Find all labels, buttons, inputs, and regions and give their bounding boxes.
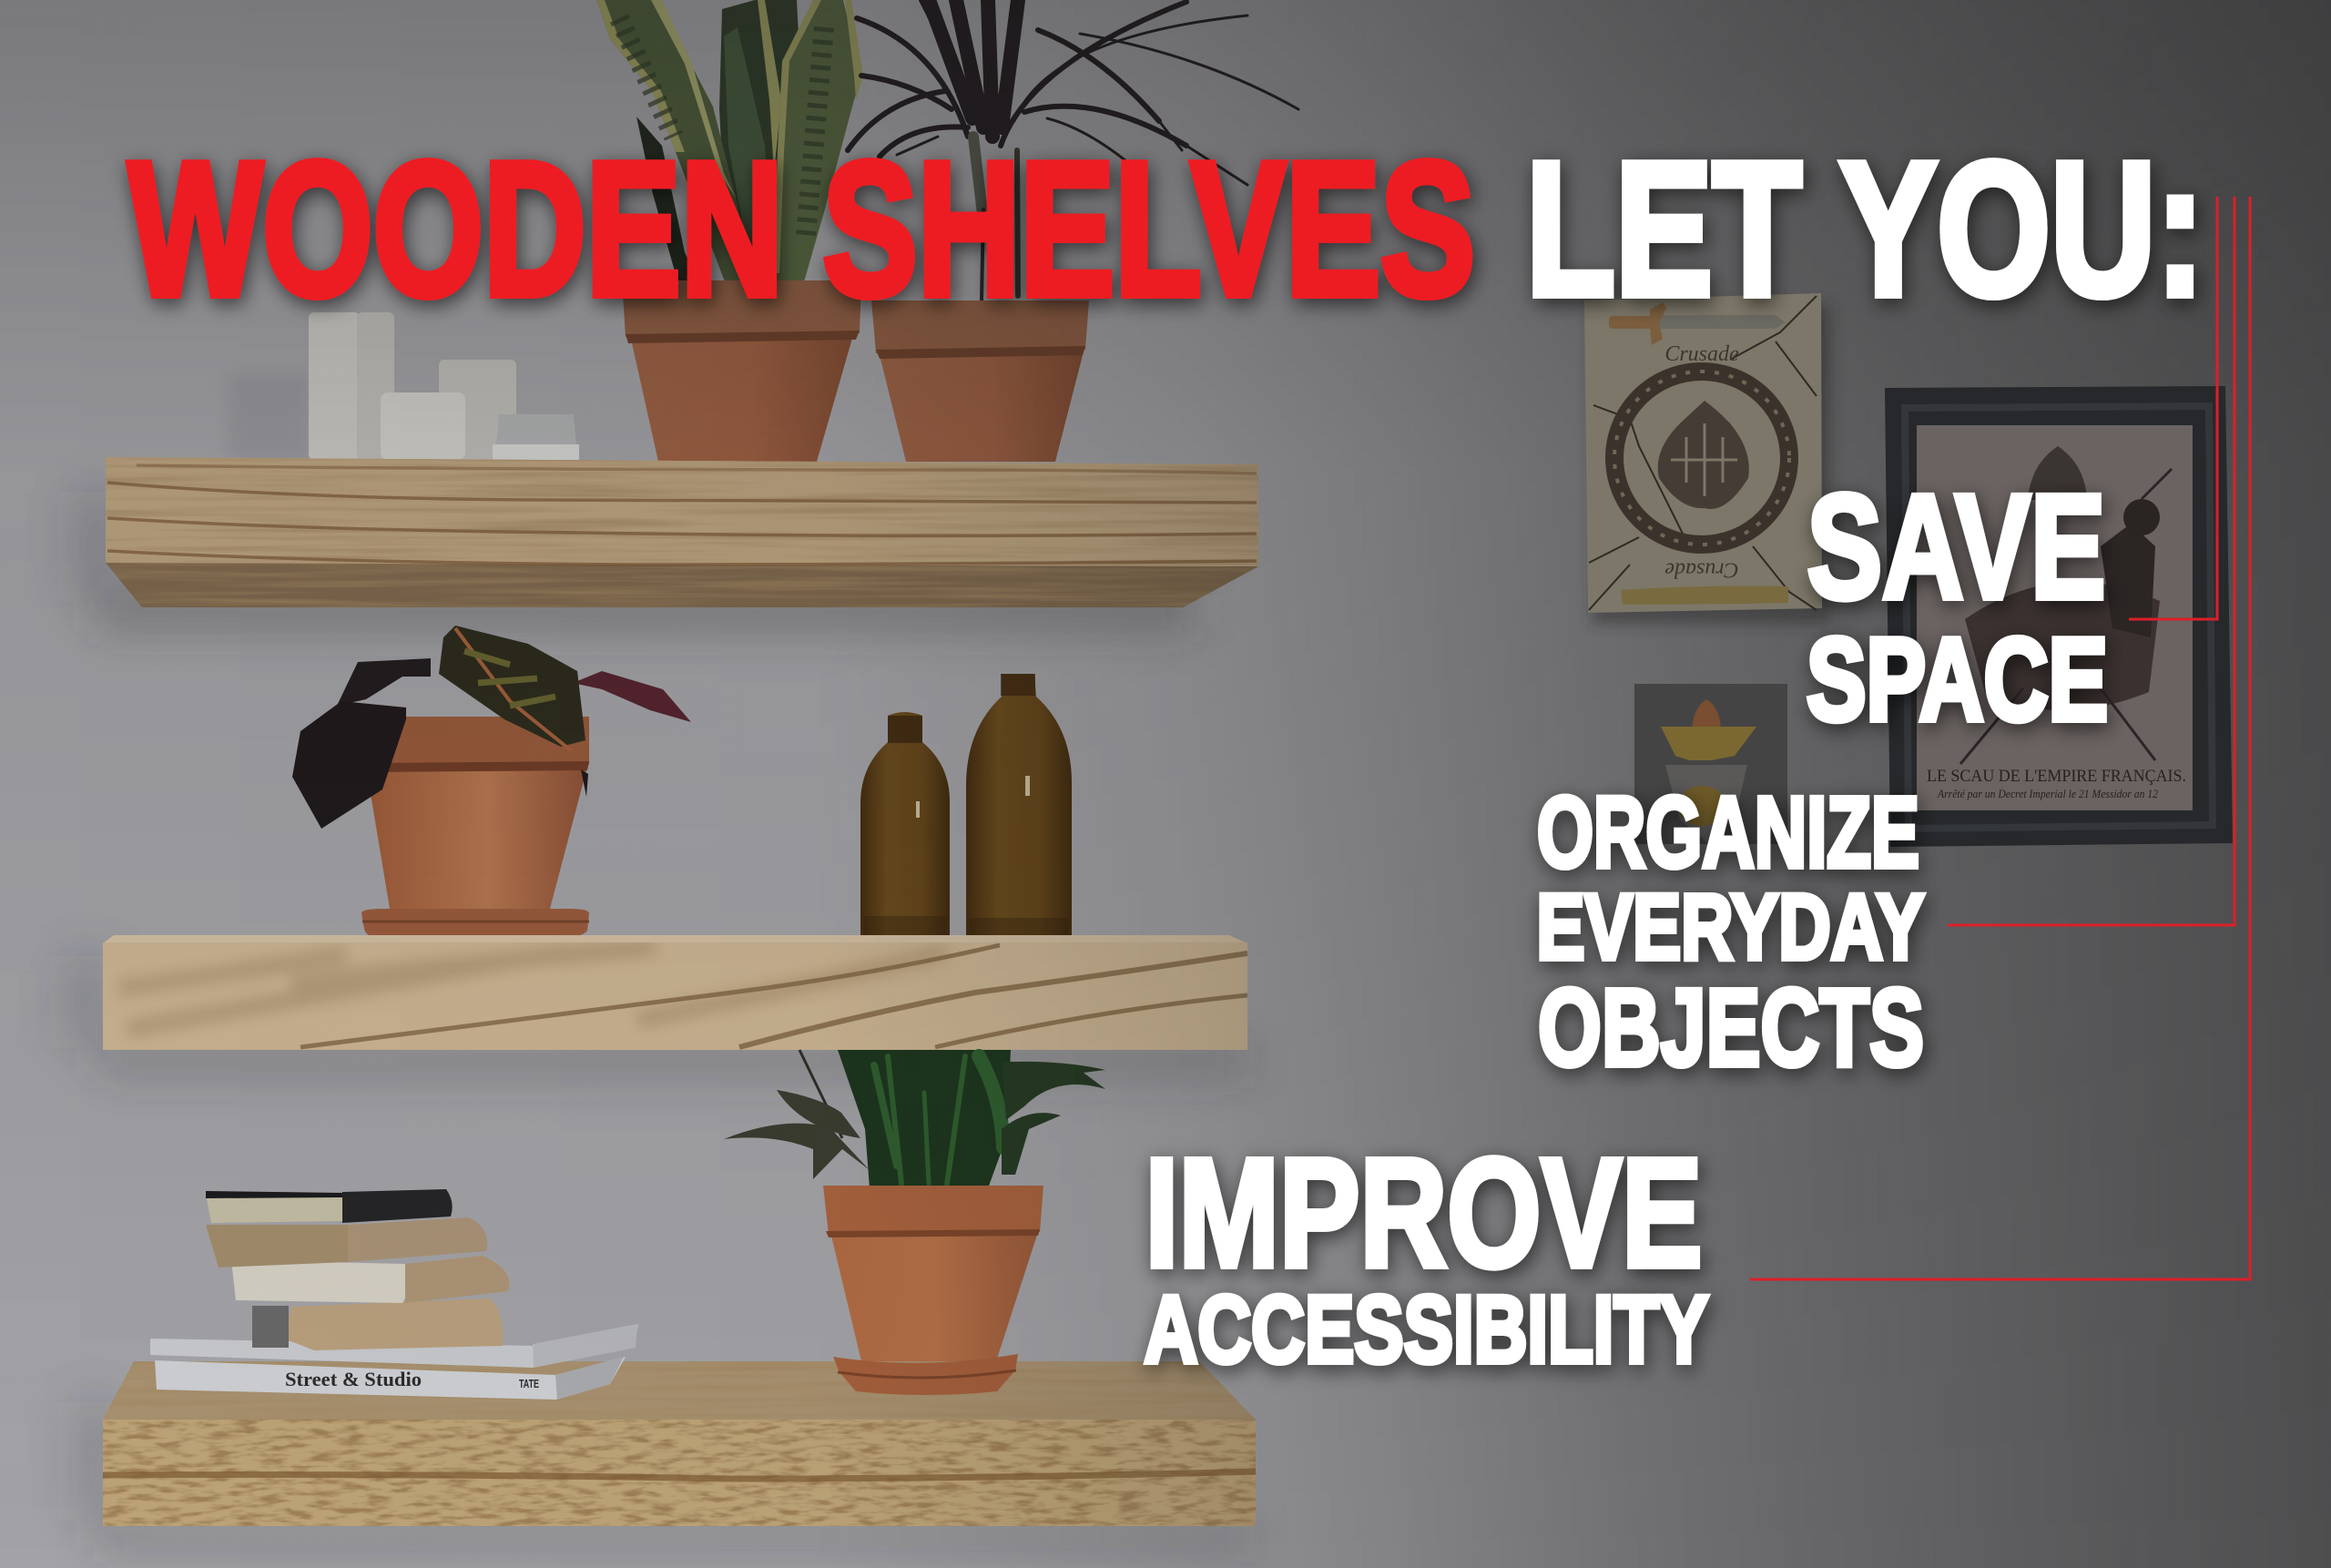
pot: terracotta middle shelf — [361, 717, 589, 937]
plant: snake plant — [596, 0, 863, 328]
magazine: Street & Studio: TATE — [519, 1377, 539, 1390]
sword — [1609, 302, 1786, 345]
medal — [1658, 401, 1749, 509]
art: Empire frame — [1885, 386, 2233, 847]
book: top black — [206, 1193, 342, 1223]
wall shadows under shelves — [64, 492, 1247, 1550]
connector: organize everyday objects — [1948, 197, 2234, 925]
plant: peace lily — [724, 1050, 1105, 1188]
bottle: tall amber — [966, 674, 1072, 936]
plant: dark dracaena — [848, 0, 1298, 300]
shelf: top — [106, 457, 1258, 607]
book: second — [206, 1225, 348, 1268]
frame sub caption: Arrêté par un Decret Imperial le 21 Messidor an 12 — [1937, 787, 2158, 800]
label: save space: SPACE — [1807, 614, 2108, 745]
art: small papal plaque — [1634, 684, 1787, 844]
label: improve accessibility: ACCESSIBILITY — [1144, 1277, 1708, 1383]
connector: save space — [2129, 197, 2217, 619]
label: organize everyday objects — [1537, 777, 1925, 1089]
magazine: Street & Studio: Street & Studio — [285, 1368, 422, 1390]
medal ring — [1614, 372, 1789, 545]
title: wooden shelves: WOODEN SHELVES — [128, 124, 1475, 335]
pot: second terracotta top shelf — [871, 300, 1089, 462]
label: save space — [1807, 463, 2108, 745]
pot: terracotta bottom shelf — [823, 1186, 1043, 1395]
label: organize everyday objects: OBJECTS — [1538, 965, 1924, 1089]
title — [128, 124, 2204, 335]
magazine: upper — [150, 1324, 638, 1368]
plant: croton leaves behind pot — [337, 658, 691, 722]
label: organize everyday objects: ORGANIZE — [1537, 777, 1919, 889]
candles and glass jar — [228, 312, 579, 460]
shelf: bottom — [103, 1361, 1256, 1526]
inverted Crusade: Crusade — [1664, 557, 1739, 581]
label: improve accessibility — [1144, 1127, 1708, 1383]
plant: croton front leaves — [292, 626, 588, 829]
book: fourth — [284, 1298, 503, 1350]
label: improve accessibility: IMPROVE — [1145, 1127, 1703, 1300]
label: Crusade: Crusade — [1664, 342, 1739, 366]
shelf: middle — [103, 935, 1247, 1050]
frame caption: LE SCAU DE L'EMPIRE FRANÇAIS. — [1927, 767, 2186, 786]
book: third — [231, 1260, 407, 1303]
gold bar — [1621, 586, 1788, 605]
connector: improve accessibility — [1750, 197, 2250, 1279]
book stack — [150, 1189, 638, 1400]
bottle: small amber — [860, 712, 950, 936]
label: save space: SAVE — [1807, 463, 2105, 630]
red connector lines — [1750, 197, 2250, 1279]
pot: large terracotta top shelf — [622, 280, 861, 462]
art: Crusade plaque — [1584, 293, 1830, 624]
magazine: Street & Studio — [155, 1357, 626, 1400]
label: organize everyday objects: EVERYDAY — [1537, 875, 1925, 979]
